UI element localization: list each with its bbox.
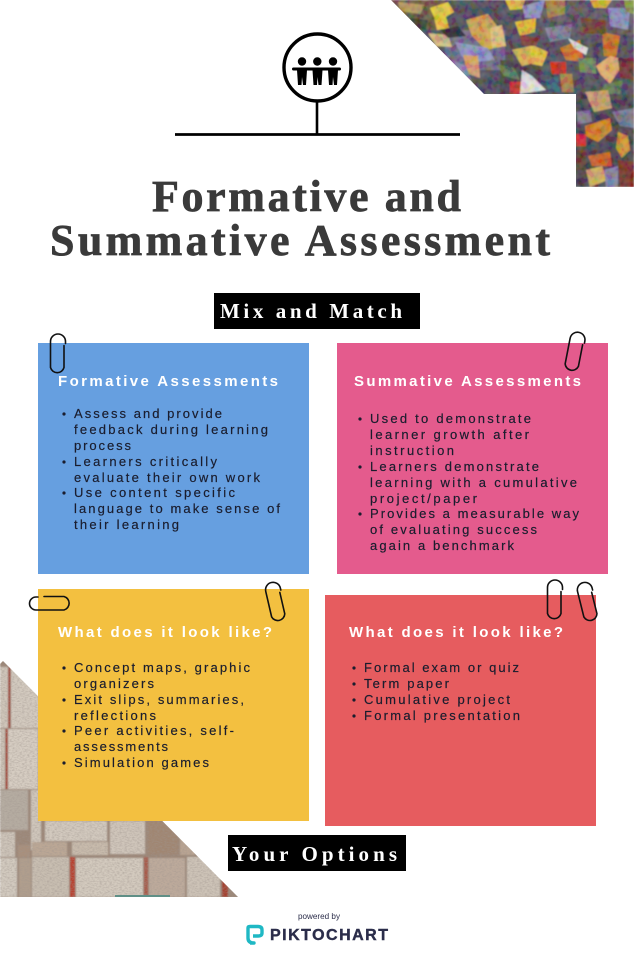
list: formative bullets: Use content specific: [74, 485, 236, 500]
icon: paperclip on red panel right: [576, 581, 600, 622]
list: summative bullets: learning with a cumulative: [370, 475, 577, 490]
title: Formative and: [152, 172, 461, 221]
icon: paperclip on yellow panel right: [264, 581, 287, 622]
list: summative example bullets: Cumulative project: [364, 692, 510, 707]
list: formative example bullets: Exit slips, summaries,: [74, 692, 244, 707]
list: formative bullets: [62, 406, 280, 532]
list: summative bullets: Used to demonstrate: [370, 411, 531, 426]
icon: paperclip on pink panel: [564, 331, 586, 372]
icon: paperclip on blue panel: [50, 334, 66, 373]
list: formative bullets: Learners critically: [74, 454, 218, 469]
list: summative bullets: of evaluating success: [370, 522, 538, 537]
list: summative example bullets: Term paper: [364, 676, 450, 691]
title: [50, 172, 550, 265]
icon: Piktochart logo mark: [248, 926, 262, 943]
footer: powered by Piktochart logo: powered by: [298, 912, 340, 921]
icon: paperclip on yellow panel left: [30, 596, 69, 610]
list: summative example bullets: Formal presentation: [364, 708, 520, 723]
list: summative bullets: instruction: [370, 443, 454, 458]
list: formative bullets: feedback during learning: [74, 422, 268, 437]
heading label: Your Options: [228, 835, 406, 871]
list: formative example bullets: assessments: [74, 739, 168, 754]
panel: formative examples: What does it look like?: [58, 624, 272, 641]
heading label: Mix and Match: [214, 293, 420, 329]
list: formative bullets: Assess and provide: [74, 406, 222, 421]
panel: summative examples: [325, 595, 596, 826]
title: Summative Assessment: [50, 216, 550, 265]
footer: powered by Piktochart logo: [248, 912, 388, 944]
panel: formative examples: [38, 589, 309, 821]
panel: summative examples: What does it look like?: [349, 624, 563, 641]
photo: open books corner: [0, 660, 240, 898]
list: formative example bullets: reflections: [74, 708, 156, 723]
list: formative example bullets: [62, 660, 251, 770]
list: formative bullets: their learning: [74, 517, 179, 532]
panel: formative assessments: Formative Assessments: [58, 373, 278, 390]
panel: summative assessments: [337, 343, 608, 574]
list: formative example bullets: Simulation games: [74, 755, 210, 770]
list: formative bullets: evaluate their own work: [74, 470, 260, 485]
heading label: Mix and Match: Mix and Match: [220, 299, 402, 323]
photo: puzzle pieces corner: [385, 0, 634, 187]
icon: paperclip on red panel left: [548, 580, 562, 619]
list: summative example bullets: Formal exam or quiz: [364, 660, 519, 675]
list: summative bullets: project/paper: [370, 491, 478, 506]
list: summative bullets: again a benchmark: [370, 538, 514, 553]
list: formative example bullets: Peer activities, self-: [74, 723, 234, 738]
list: summative bullets: [358, 411, 580, 553]
list: formative example bullets: organizers: [74, 676, 154, 691]
heading label: Your Options: Your Options: [232, 842, 397, 866]
list: formative bullets: process: [74, 438, 132, 453]
panel: summative assessments: Summative Assessments: [354, 373, 581, 390]
list: summative bullets: Provides a measurable way: [370, 506, 580, 521]
footer: powered by Piktochart logo: PIKTOCHART: [270, 927, 388, 944]
panel: formative assessments: [38, 343, 309, 574]
icon: people in circle on a line: [175, 34, 460, 134]
list: summative example bullets: [352, 660, 520, 723]
list: summative bullets: learner growth after: [370, 427, 530, 442]
list: summative bullets: Learners demonstrate: [370, 459, 539, 474]
list: formative bullets: language to make sense of: [74, 501, 280, 516]
list: formative example bullets: Concept maps, graphic: [74, 660, 250, 675]
